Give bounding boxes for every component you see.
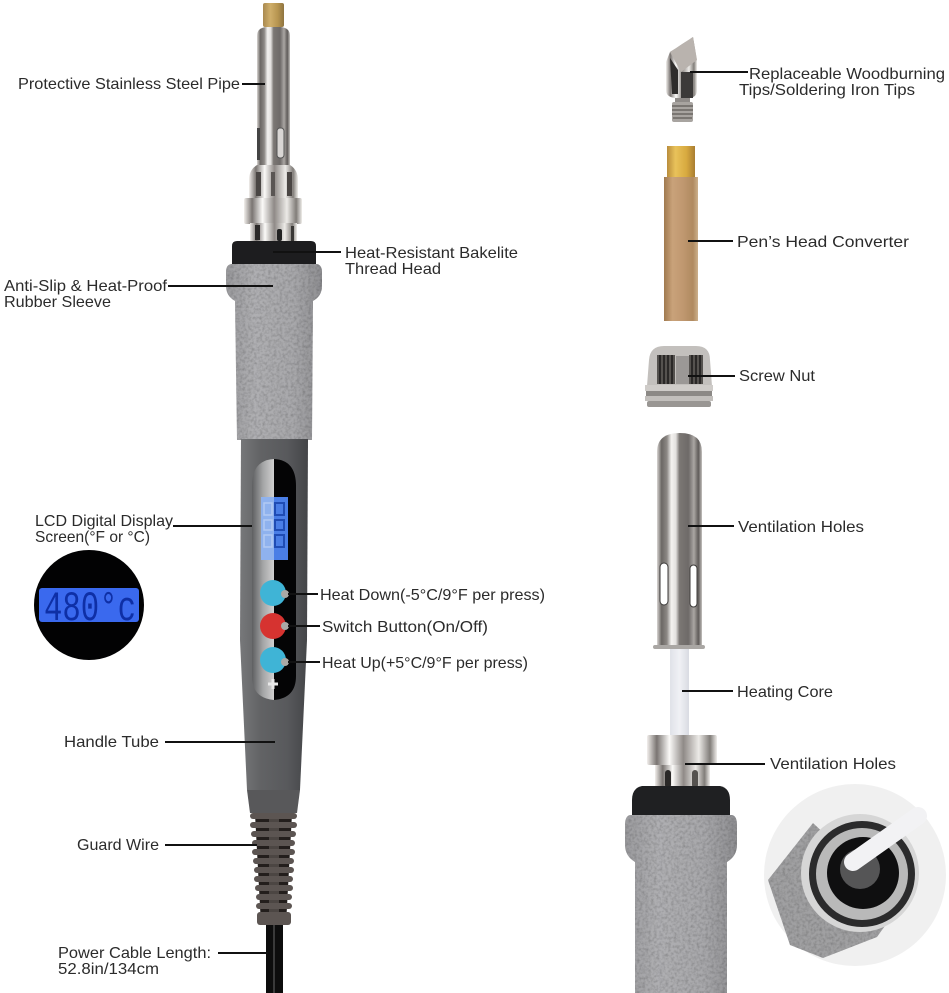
- label: guard wire: Guard Wire: [77, 837, 159, 854]
- part: lower assembly rubber sleeve: [625, 815, 737, 993]
- label: heat up: Heat Up(+5°C/9°F per press): [322, 655, 528, 672]
- label: ventilation holes lower: Ventilation Holes: [770, 756, 896, 773]
- part: ventilation tube: [653, 433, 705, 649]
- iron: handle tube: [240, 439, 308, 790]
- label: bakelite thread head: [273, 245, 518, 278]
- iron: control panel: [252, 459, 296, 700]
- label: bakelite thread head: Heat-Resistant Bakelite: [345, 245, 518, 262]
- iron: heat up button: [260, 647, 289, 673]
- label: LCD display: Screen(°F or °C): [35, 529, 150, 546]
- exploded parts: [625, 37, 737, 993]
- label: power cable length: [58, 945, 268, 978]
- label: screw nut: Screw Nut: [739, 368, 816, 385]
- iron: brass tip: [263, 3, 284, 27]
- iron: heat down button: [260, 580, 289, 606]
- label: ventilation holes upper: Ventilation Holes: [738, 519, 864, 536]
- iron: protective stainless steel pipe: [257, 27, 290, 165]
- iron: plus mark: [268, 679, 278, 689]
- iron: chrome collar: [244, 165, 302, 242]
- label: power cable length: 52.8in/134cm: [58, 961, 159, 978]
- label: LCD display: [35, 513, 252, 546]
- iron: power cable: [266, 925, 283, 993]
- iron: LCD digital display: [261, 497, 288, 560]
- label: screw nut: [688, 368, 816, 385]
- part: pen head converter: [664, 146, 698, 321]
- part: heating core: [670, 649, 689, 737]
- part: lower assembly bakelite head: [632, 786, 730, 820]
- label: switch button: Switch Button(On/Off): [322, 619, 488, 636]
- label: power cable length: Power Cable Length:: [58, 945, 211, 962]
- label: LCD display: LCD Digital Display: [35, 513, 173, 530]
- iron: guard wire strain relief: [250, 813, 297, 925]
- iron: handle tube end ring: [247, 790, 300, 813]
- label: replaceable tips: Replaceable Woodburning: [749, 66, 945, 83]
- label: protective stainless steel pipe: Protective Stainless Steel Pipe: [18, 76, 240, 93]
- soldering iron assembled: [226, 3, 322, 993]
- label: heat down: Heat Down(-5°C/9°F per press): [320, 587, 545, 604]
- iron: bakelite thread head: [232, 241, 316, 266]
- label: replaceable tips: [690, 66, 945, 99]
- part: screw nut: [645, 346, 713, 407]
- label: pen head converter: Pen’s Head Converter: [737, 234, 910, 251]
- inset: LCD temperature readout: 480°c: [44, 585, 136, 633]
- part: replaceable tip: [666, 37, 697, 122]
- label: rubber sleeve: [4, 278, 273, 311]
- inset: top view of iron head: [764, 784, 946, 966]
- label: rubber sleeve: Anti-Slip & Heat-Proof: [4, 278, 168, 295]
- label: heating core: Heating Core: [737, 684, 833, 701]
- label: bakelite thread head: Thread Head: [345, 261, 441, 278]
- label: rubber sleeve: Rubber Sleeve: [4, 294, 111, 311]
- label: replaceable tips: Tips/Soldering Iron Tips: [739, 82, 915, 99]
- iron: rubber sleeve: [226, 264, 322, 440]
- inset: LCD temperature readout: [34, 550, 144, 660]
- iron: power switch button: [260, 613, 289, 639]
- label: handle tube: Handle Tube: [64, 734, 159, 751]
- part: lower assembly collar: [647, 735, 717, 791]
